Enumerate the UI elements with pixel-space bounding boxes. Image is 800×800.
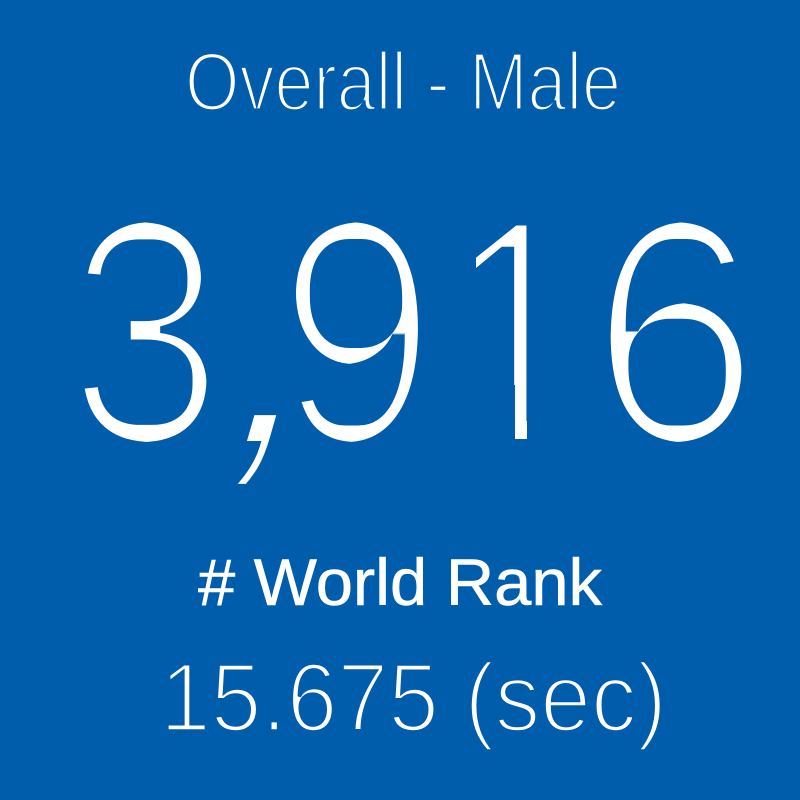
main value: 3 <box>67 154 225 510</box>
main value: , <box>189 144 389 518</box>
metric label: # World Rank <box>198 545 603 619</box>
main value: 6 <box>589 154 761 510</box>
main value: 1 <box>439 155 592 511</box>
title: Overall - Male <box>185 35 621 128</box>
secondary value: 15.675 (sec) <box>160 643 667 752</box>
main value: 9 <box>276 153 438 510</box>
main value <box>67 144 761 518</box>
